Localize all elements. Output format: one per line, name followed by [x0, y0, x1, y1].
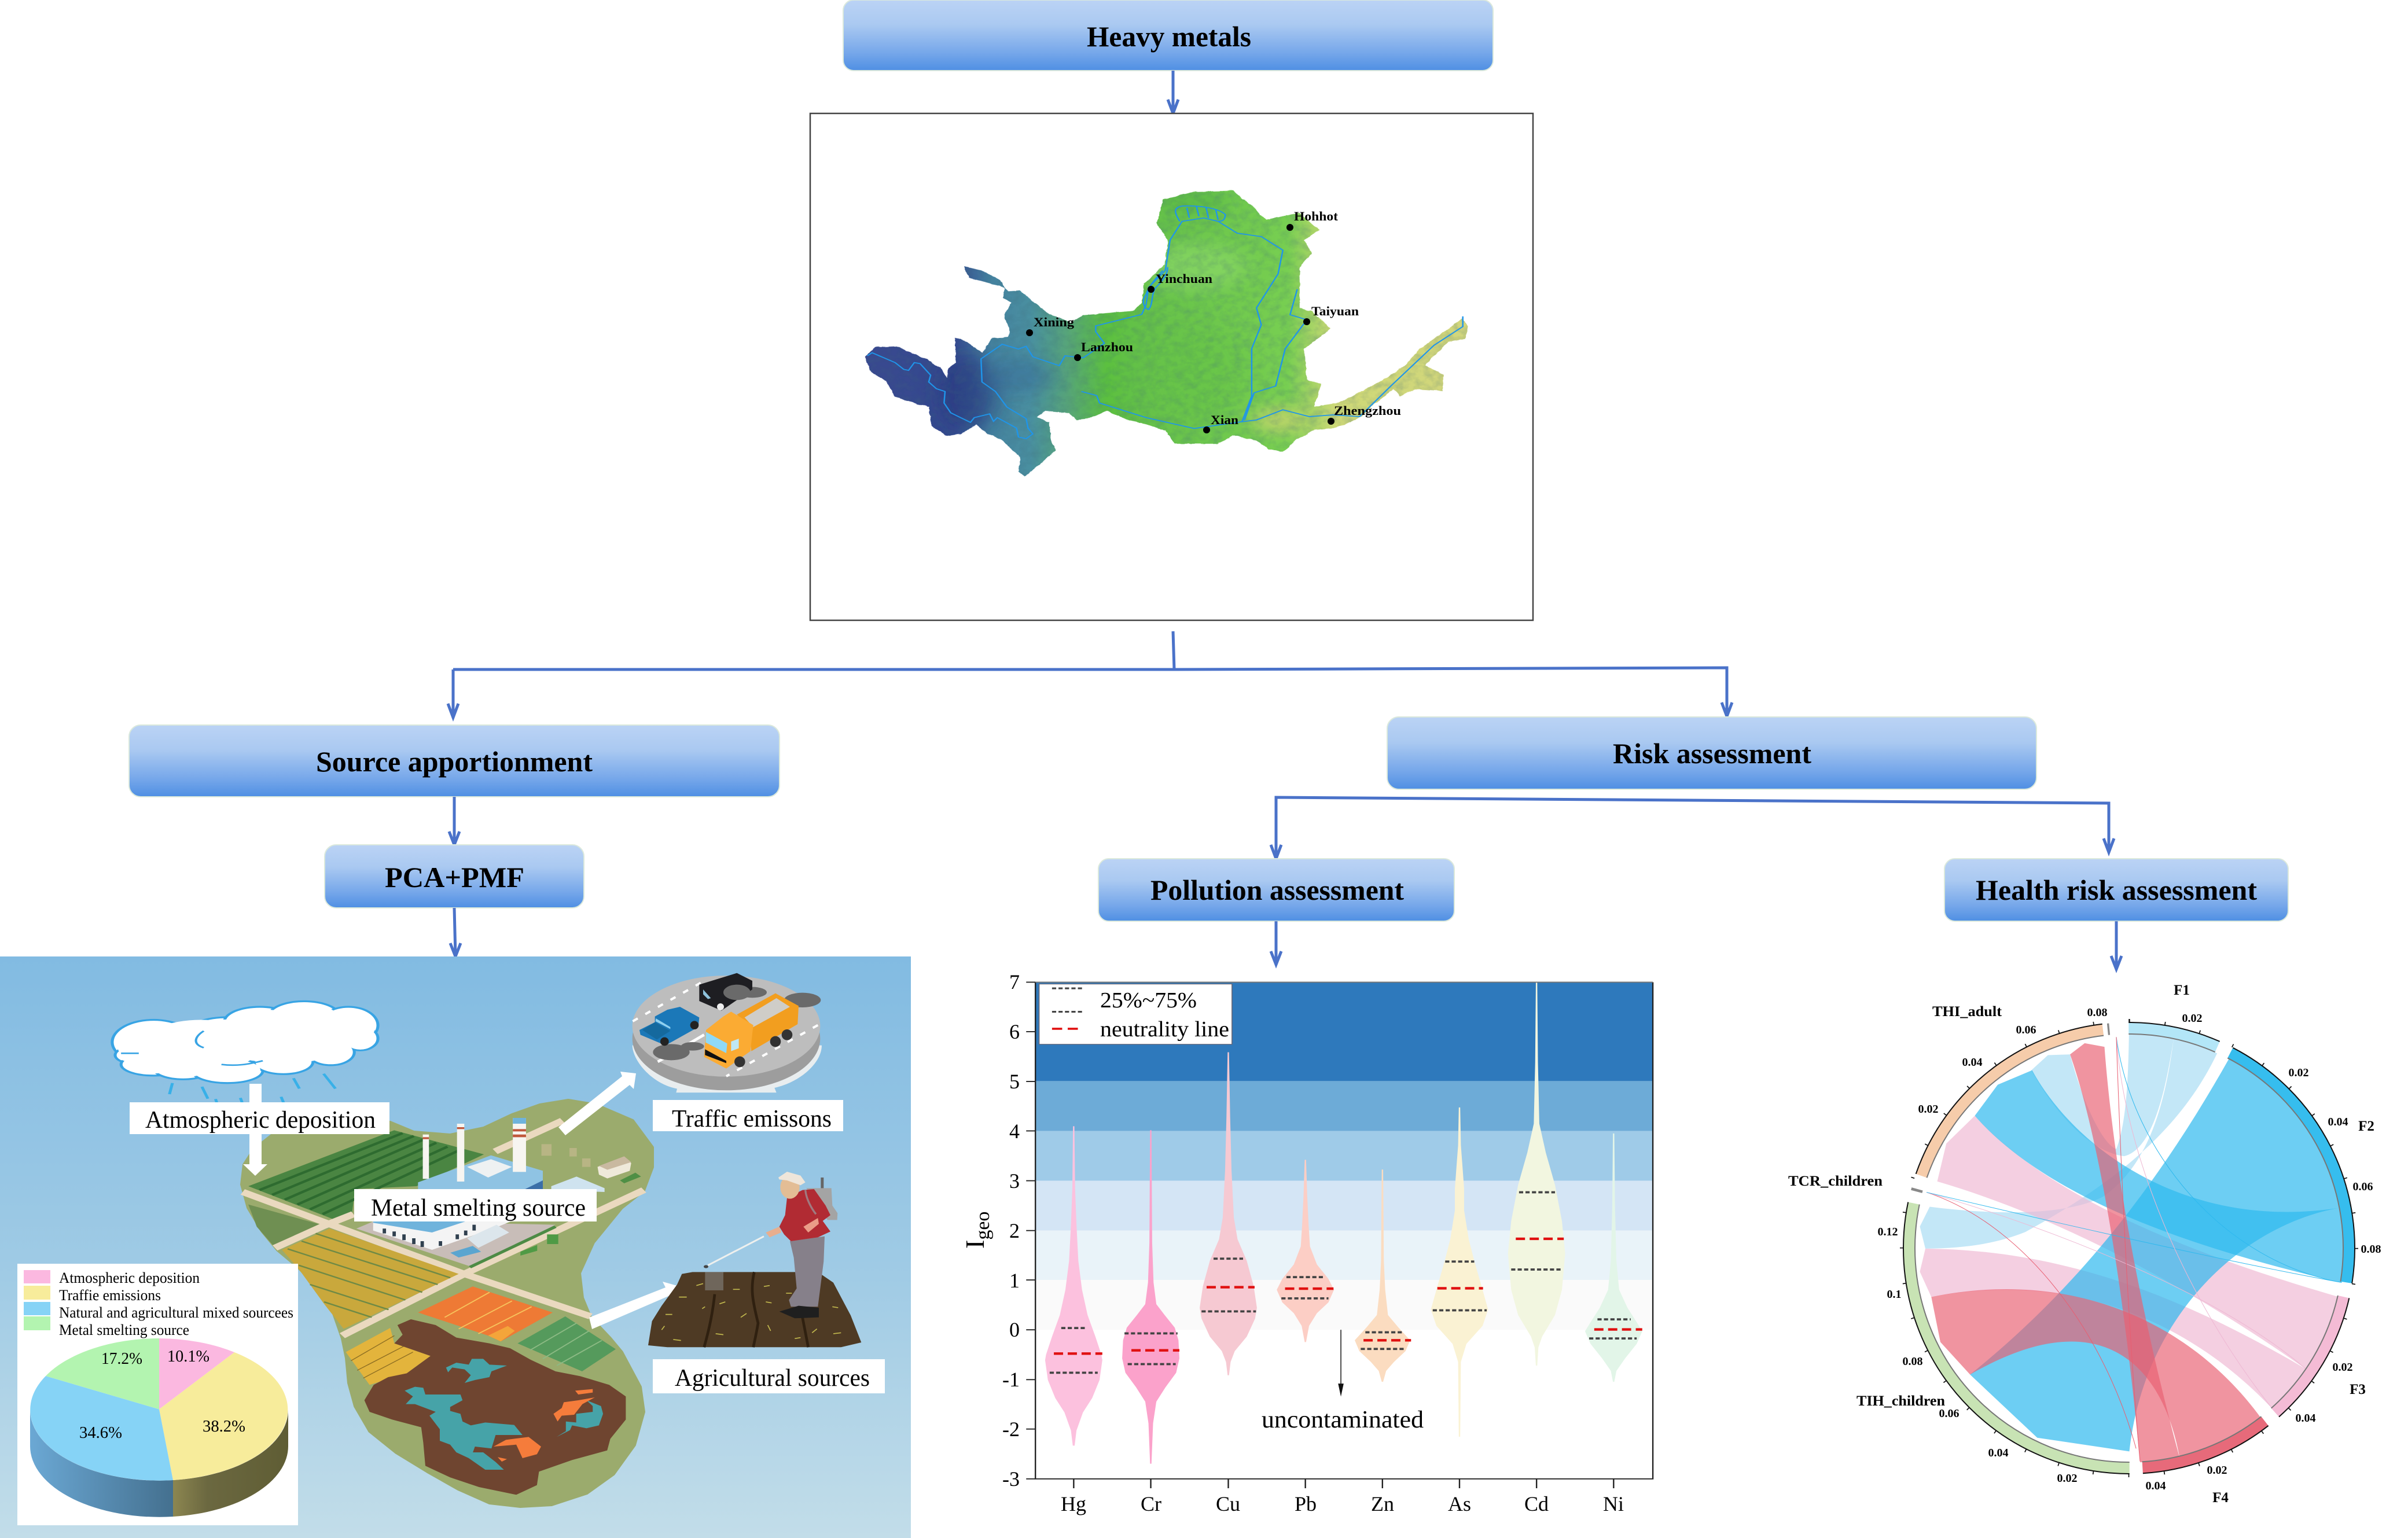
heading box: Pollution assessment: Pollution assessment — [1150, 874, 1404, 906]
city: Xining: Xining — [1034, 315, 1074, 329]
legend: pie colours: Atmospheric deposition — [59, 1270, 200, 1286]
y axis numbers: 4 — [1009, 1120, 1020, 1143]
city: Zhengzhou — [1328, 403, 1401, 425]
violin: Pb — [1277, 1160, 1334, 1342]
green striped field — [248, 1130, 484, 1220]
arrow: PCA+PMF to scene — [450, 908, 461, 956]
x axis labels — [1061, 1492, 1624, 1515]
chord: F2 to TIH_children — [1970, 1059, 2340, 1451]
legend: pie colours: Traffie emissions — [59, 1287, 161, 1304]
arrow: pollution assessment to violin chart — [1271, 921, 1281, 965]
tick labels — [1877, 1006, 2381, 1492]
heading box: PCA+PMF: PCA+PMF — [385, 861, 524, 893]
chart: 3D pie: 38.2% — [203, 1418, 245, 1436]
x axis labels: Hg — [1061, 1492, 1086, 1515]
city: Yinchuan: Yinchuan — [1156, 271, 1212, 286]
icon: clouds — [112, 1001, 378, 1102]
sector names — [1788, 983, 2374, 1506]
chord: F3 to TIH_children — [1920, 1249, 2306, 1409]
x axis labels: Cu — [1216, 1492, 1240, 1515]
tick labels: 0.04 — [1962, 1056, 1983, 1069]
y axis numbers: 1 — [1009, 1269, 1020, 1292]
label: Traffic emissons — [653, 1100, 843, 1132]
heading box: Health risk assessment: Health risk assessment — [1976, 874, 2257, 906]
city: Hohhot — [1286, 209, 1339, 231]
text: uncontaminated: uncontaminated — [1262, 1407, 1424, 1433]
sector names: F2 — [2358, 1118, 2374, 1134]
y axis numbers: 3 — [1009, 1169, 1020, 1193]
violin: As — [1431, 1107, 1488, 1437]
tick labels: 0.06 — [1939, 1407, 1960, 1420]
icon: traffic roundabout — [633, 973, 822, 1092]
y axis numbers: 6 — [1009, 1020, 1020, 1043]
brown polluted land — [365, 1319, 626, 1495]
y axis numbers — [1002, 970, 1020, 1491]
chart: 3D pie: 34.6% — [79, 1424, 122, 1442]
tick labels: 0.04 — [1988, 1447, 2008, 1459]
quartile lines — [1050, 1193, 1637, 1373]
label: Agricultural sources: Agricultural sources — [675, 1365, 870, 1392]
heading box: Risk assessment — [1387, 717, 2036, 789]
chord: F4 to TIH_children — [1931, 1289, 2262, 1458]
city: Taiyuan — [1303, 304, 1359, 325]
city: Lanzhou: Lanzhou — [1081, 340, 1133, 354]
sector names: TCR_children — [1788, 1173, 1883, 1189]
arms — [766, 1218, 819, 1237]
heading box: Health risk assessment — [1944, 859, 2288, 921]
tick labels: 0.08 — [2087, 1006, 2108, 1019]
sector names: F1 — [2174, 983, 2190, 998]
trousers and shoes — [780, 1237, 825, 1318]
chord: F4 to THI_adult — [2070, 1043, 2179, 1462]
y axis numbers: 0 — [1009, 1318, 1020, 1341]
panel: pie chart card — [17, 1264, 298, 1525]
heading box: Risk assessment: Risk assessment — [1613, 737, 1811, 770]
yellow striped field — [282, 1228, 459, 1329]
median lines — [1054, 1239, 1642, 1353]
teal pools — [405, 1359, 603, 1470]
arrow: to traffic — [558, 1072, 636, 1135]
tick labels: 0.02 — [2057, 1472, 2078, 1485]
roads — [242, 1121, 644, 1335]
factory pad — [356, 1221, 556, 1267]
heading box: Pollution assessment — [1098, 859, 1454, 921]
legend keys — [1052, 988, 1083, 1029]
y axis numbers: 2 — [1009, 1219, 1020, 1242]
chord: F2 to THI_adult — [1975, 1070, 2344, 1282]
small yellow field — [345, 1328, 431, 1385]
tick labels: 0.04 — [2295, 1412, 2316, 1425]
poles, house and trees — [520, 1144, 641, 1256]
arrow: health risk assessment to chord chart — [2111, 921, 2122, 969]
spray mist — [705, 1272, 723, 1290]
tick labels: 0.04 — [2146, 1480, 2166, 1492]
city: Hohhot: Hohhot — [1294, 209, 1339, 223]
orange field — [418, 1286, 553, 1341]
head and hat — [778, 1172, 806, 1199]
tick labels: 0.02 — [2207, 1464, 2227, 1477]
tick labels: 0.02 — [1918, 1103, 1939, 1116]
chord: F1 to TIH_children — [1920, 1039, 2217, 1249]
legend: pie colours: Metal smelting source — [59, 1322, 189, 1338]
city: Xian — [1203, 413, 1238, 433]
factory buildings — [373, 1156, 605, 1257]
sector names: THI_adult — [1932, 1004, 2002, 1020]
chords — [1920, 1034, 2344, 1462]
legend: pie colours — [24, 1270, 293, 1338]
tick labels: 0.12 — [1877, 1226, 1898, 1238]
violin: Zn — [1355, 1169, 1410, 1382]
x axis labels: Pb — [1295, 1492, 1317, 1515]
legend: pie colours: Natural and agricultural mixed sourcees — [59, 1304, 293, 1321]
heading box: Heavy metals — [843, 0, 1493, 71]
chart: Igeo violin plot — [960, 970, 1653, 1515]
sector names: F3 — [2350, 1382, 2366, 1397]
chart: health risk chord diagram — [1788, 932, 2408, 1538]
x axis labels: Zn — [1371, 1492, 1394, 1515]
thin chords — [1927, 1037, 2341, 1461]
y axis numbers: 7 — [1009, 970, 1020, 994]
arrow: to agriculture — [589, 1282, 677, 1329]
chimneys — [423, 1118, 526, 1182]
y axis numbers: -2 — [1002, 1418, 1020, 1441]
city: Lanzhou — [1074, 340, 1133, 361]
label: Metal smelting source: Metal smelting source — [371, 1195, 586, 1221]
sprayer wand — [704, 1237, 764, 1268]
island terrain — [242, 1101, 652, 1506]
city: Yinchuan — [1148, 271, 1212, 293]
violin: Hg — [1045, 1126, 1102, 1445]
sector names: F4 — [2212, 1490, 2229, 1506]
arrow: heavy metals to map — [1168, 71, 1178, 113]
heading box: Source apportionment: Source apportionment — [316, 745, 593, 778]
lower left meadow — [248, 1205, 321, 1246]
y axis numbers: -3 — [1002, 1467, 1020, 1491]
heading box: Heavy metals: Heavy metals — [1087, 20, 1251, 53]
violin: Ni — [1585, 1134, 1642, 1382]
panel: Yellow River basin map — [810, 113, 1533, 620]
y axis numbers: -1 — [1002, 1368, 1020, 1391]
torso — [780, 1189, 830, 1241]
tick labels: 0.06 — [2353, 1180, 2373, 1193]
green field — [517, 1316, 616, 1371]
arrow: uncontaminated — [1338, 1330, 1344, 1397]
label: Traffic emissons: Traffic emissons — [672, 1106, 832, 1132]
map shapes: basin terrain and rivers — [858, 186, 1477, 481]
x axis labels: Cr — [1141, 1492, 1161, 1515]
city: Taiyuan: Taiyuan — [1311, 304, 1359, 318]
violin: Cr — [1122, 1130, 1179, 1464]
tick labels: 0.1 — [1887, 1288, 1902, 1301]
chord: F1 to THI_adult — [2031, 1034, 2174, 1156]
icon: farmer on soil patch — [648, 1172, 861, 1347]
heading box: PCA+PMF — [325, 845, 584, 908]
sector names: TIH_children — [1856, 1393, 1945, 1409]
chart: 3D pie: 10.1% — [167, 1348, 209, 1366]
label: Atmospheric deposition: Atmospheric deposition — [145, 1107, 376, 1134]
violin: Cd — [1508, 982, 1565, 1366]
x axis labels: Ni — [1603, 1492, 1624, 1515]
ticks — [1902, 1021, 2356, 1476]
tick labels: 0.06 — [2016, 1024, 2036, 1036]
legend box — [1039, 984, 1232, 1044]
legend text: neutrality line — [1100, 1017, 1229, 1042]
chart: 3D pie: 17.2% — [101, 1350, 142, 1368]
chart: 3D pie — [30, 1338, 288, 1517]
upper fields, roads and factory — [242, 1118, 644, 1371]
arrow: risk fork to pollution and health assessment — [1271, 797, 2114, 859]
violin: Cu — [1200, 1052, 1257, 1375]
tick labels: 0.04 — [2328, 1116, 2348, 1128]
tick labels: 0.02 — [2288, 1066, 2309, 1079]
soil patch — [648, 1272, 861, 1347]
x axis labels: As — [1448, 1492, 1471, 1515]
orange pools — [494, 1389, 595, 1462]
y axis title: I — [960, 1240, 990, 1249]
legend text — [1100, 988, 1229, 1042]
backpack — [806, 1178, 837, 1220]
city: Xian: Xian — [1211, 413, 1238, 427]
heading box: Source apportionment — [129, 725, 780, 797]
x axis labels: Cd — [1524, 1492, 1549, 1515]
tick labels: 0.08 — [1903, 1355, 1922, 1368]
outer axis lines — [1813, 932, 2408, 1538]
ring: outer coloured sectors — [1813, 932, 2408, 1538]
lower fields and polluted land — [345, 1319, 626, 1495]
city: Xining — [1026, 315, 1074, 336]
panel: source apportionment scene — [0, 956, 911, 1538]
y axis numbers: 5 — [1009, 1070, 1020, 1093]
inner ring lines — [1829, 948, 2408, 1538]
arrow: map forks to source apportionment and risk assessment — [448, 631, 1732, 718]
label: Agricultural sources — [653, 1359, 885, 1393]
city: Zhengzhou: Zhengzhou — [1334, 403, 1401, 418]
y axis title: geo — [972, 1212, 994, 1240]
tick labels: 0.08 — [2361, 1243, 2381, 1256]
axes and ticks — [1026, 982, 1653, 1488]
legend text: 25%~75% — [1100, 988, 1197, 1013]
arrow: deposition — [243, 1084, 267, 1176]
tick labels: 0.02 — [2332, 1361, 2353, 1374]
chord: F3 to THI_adult — [1938, 1116, 2339, 1369]
arrow: source apportionment to PCA+PMF — [449, 797, 459, 845]
tick labels: 0.02 — [2182, 1012, 2203, 1025]
plot area: bands, violins, axes — [1026, 982, 1653, 1488]
